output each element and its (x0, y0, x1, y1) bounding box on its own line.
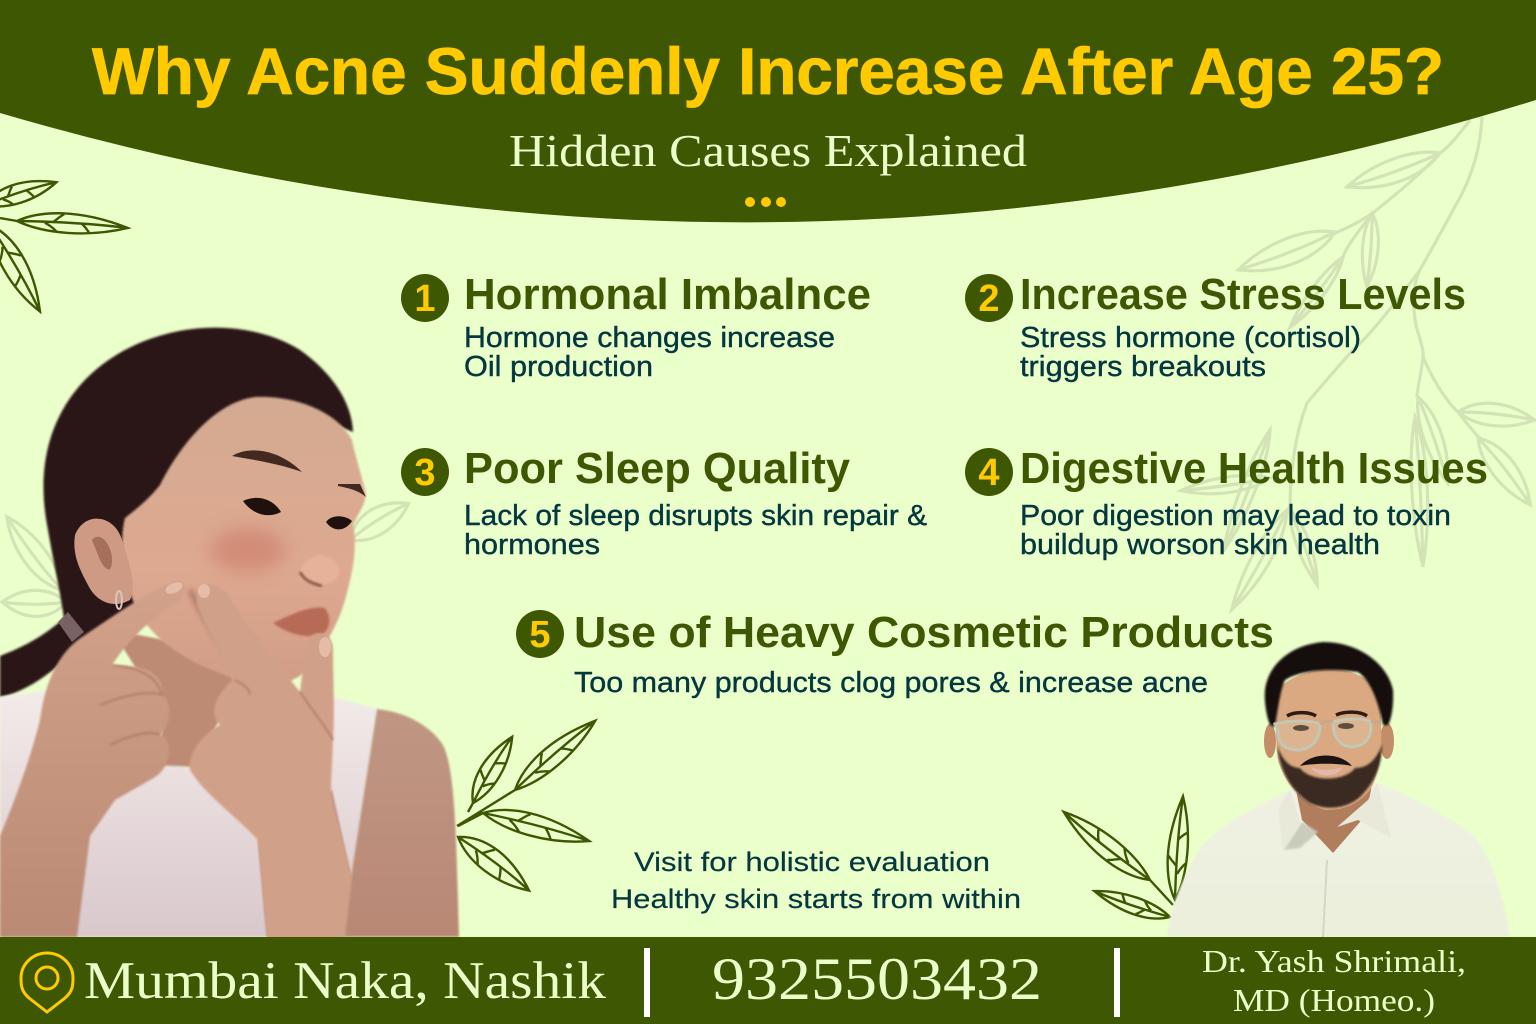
cause 5: Use of Heavy Cosmetic Products (574, 608, 1274, 657)
cause 3: 3 (414, 452, 436, 494)
doctor name and degree: Dr. Yash Shrimali, (1202, 943, 1466, 979)
icon: location pin (21, 953, 73, 1012)
title: Why Acne Suddenly Increase After Age 25? (92, 34, 1444, 108)
eyebrows (232, 450, 302, 472)
collar shadow (1284, 822, 1318, 850)
doctor name and degree: MD (Homeo.) (1233, 982, 1435, 1018)
cause 3 (401, 444, 927, 561)
cause 2 (965, 270, 1466, 383)
cause 1: Oil production (464, 351, 653, 383)
cause 4 (965, 444, 1488, 561)
ears (1264, 724, 1276, 758)
cause 1: 1 (414, 278, 436, 320)
cause 5: Too many products clog pores & increase acne (574, 667, 1208, 699)
woman's shoulder and arm (258, 709, 459, 937)
cause 4: Digestive Health Issues (1020, 444, 1488, 493)
closing message: Visit for holistic evaluation (634, 847, 990, 877)
dark leaves, upper left (0, 172, 128, 317)
cause 1: Hormone changes increase (464, 322, 835, 354)
hair (0, 328, 353, 697)
pale botanical branch, upper right (1180, 117, 1536, 615)
footer band (0, 937, 1536, 1024)
face (122, 397, 366, 685)
woman's right hand and forearm (190, 585, 352, 937)
cause 2: 2 (978, 278, 1000, 320)
earring (116, 591, 122, 609)
photo: Dr. Yash Shrimali (1167, 642, 1510, 937)
fingernails (164, 580, 331, 657)
glasses (1275, 719, 1381, 750)
ear (74, 519, 133, 604)
cause 2: Stress hormone (cortisol) (1020, 322, 1361, 354)
hair (1265, 642, 1393, 727)
photo: woman touching acne on her cheek (0, 328, 459, 937)
collar (1278, 783, 1391, 850)
woman's left hand and forearm (0, 580, 185, 937)
neck (112, 630, 240, 767)
cause 5 (516, 608, 1274, 699)
beard (1277, 745, 1382, 808)
cause 1: Hormonal Imbalnce (464, 270, 871, 319)
doctor's neck (1293, 770, 1375, 853)
cause 2: Increase Stress Levels (1020, 270, 1466, 319)
eyes (243, 498, 281, 515)
shirt (0, 690, 378, 937)
pale leaves behind woman (0, 491, 415, 616)
cheek redness (210, 528, 286, 572)
lips (273, 607, 329, 636)
phone number: 9325503432 (712, 946, 1042, 1012)
cause 4: buildup worson skin health (1020, 529, 1380, 561)
cause 4: 4 (978, 452, 1000, 494)
face (1276, 669, 1381, 810)
closing message: Healthy skin starts from within (611, 884, 1021, 914)
eyebrows and eyes (1287, 712, 1367, 716)
cause 3: hormones (464, 529, 600, 561)
dark leaves, beside doctor (1056, 795, 1192, 926)
cause 3: Lack of sleep disrupts skin repair & (464, 500, 927, 532)
finger shading (100, 665, 333, 745)
cause 4: Poor digestion may lead to toxin (1020, 500, 1451, 532)
cause 2: triggers breakouts (1020, 351, 1266, 383)
cause 5: 5 (529, 614, 551, 656)
closing message (611, 847, 1021, 914)
nose (300, 555, 340, 585)
placket line (1323, 860, 1327, 937)
moustache and smile (1300, 756, 1352, 766)
cheek crease shadow (190, 590, 245, 680)
dark leaves, centre (451, 712, 601, 899)
doctor name and degree (1202, 943, 1466, 1018)
cause 1 (401, 270, 871, 383)
location text: Mumbai Naka, Nashik (84, 952, 607, 1010)
cause 3: Poor Sleep Quality (464, 444, 851, 493)
hair tie (58, 612, 84, 642)
subtitle: Hidden Causes Explained (509, 125, 1027, 176)
doctor's shirt (1167, 783, 1510, 937)
header band (0, 0, 1536, 222)
header dots (745, 197, 786, 207)
